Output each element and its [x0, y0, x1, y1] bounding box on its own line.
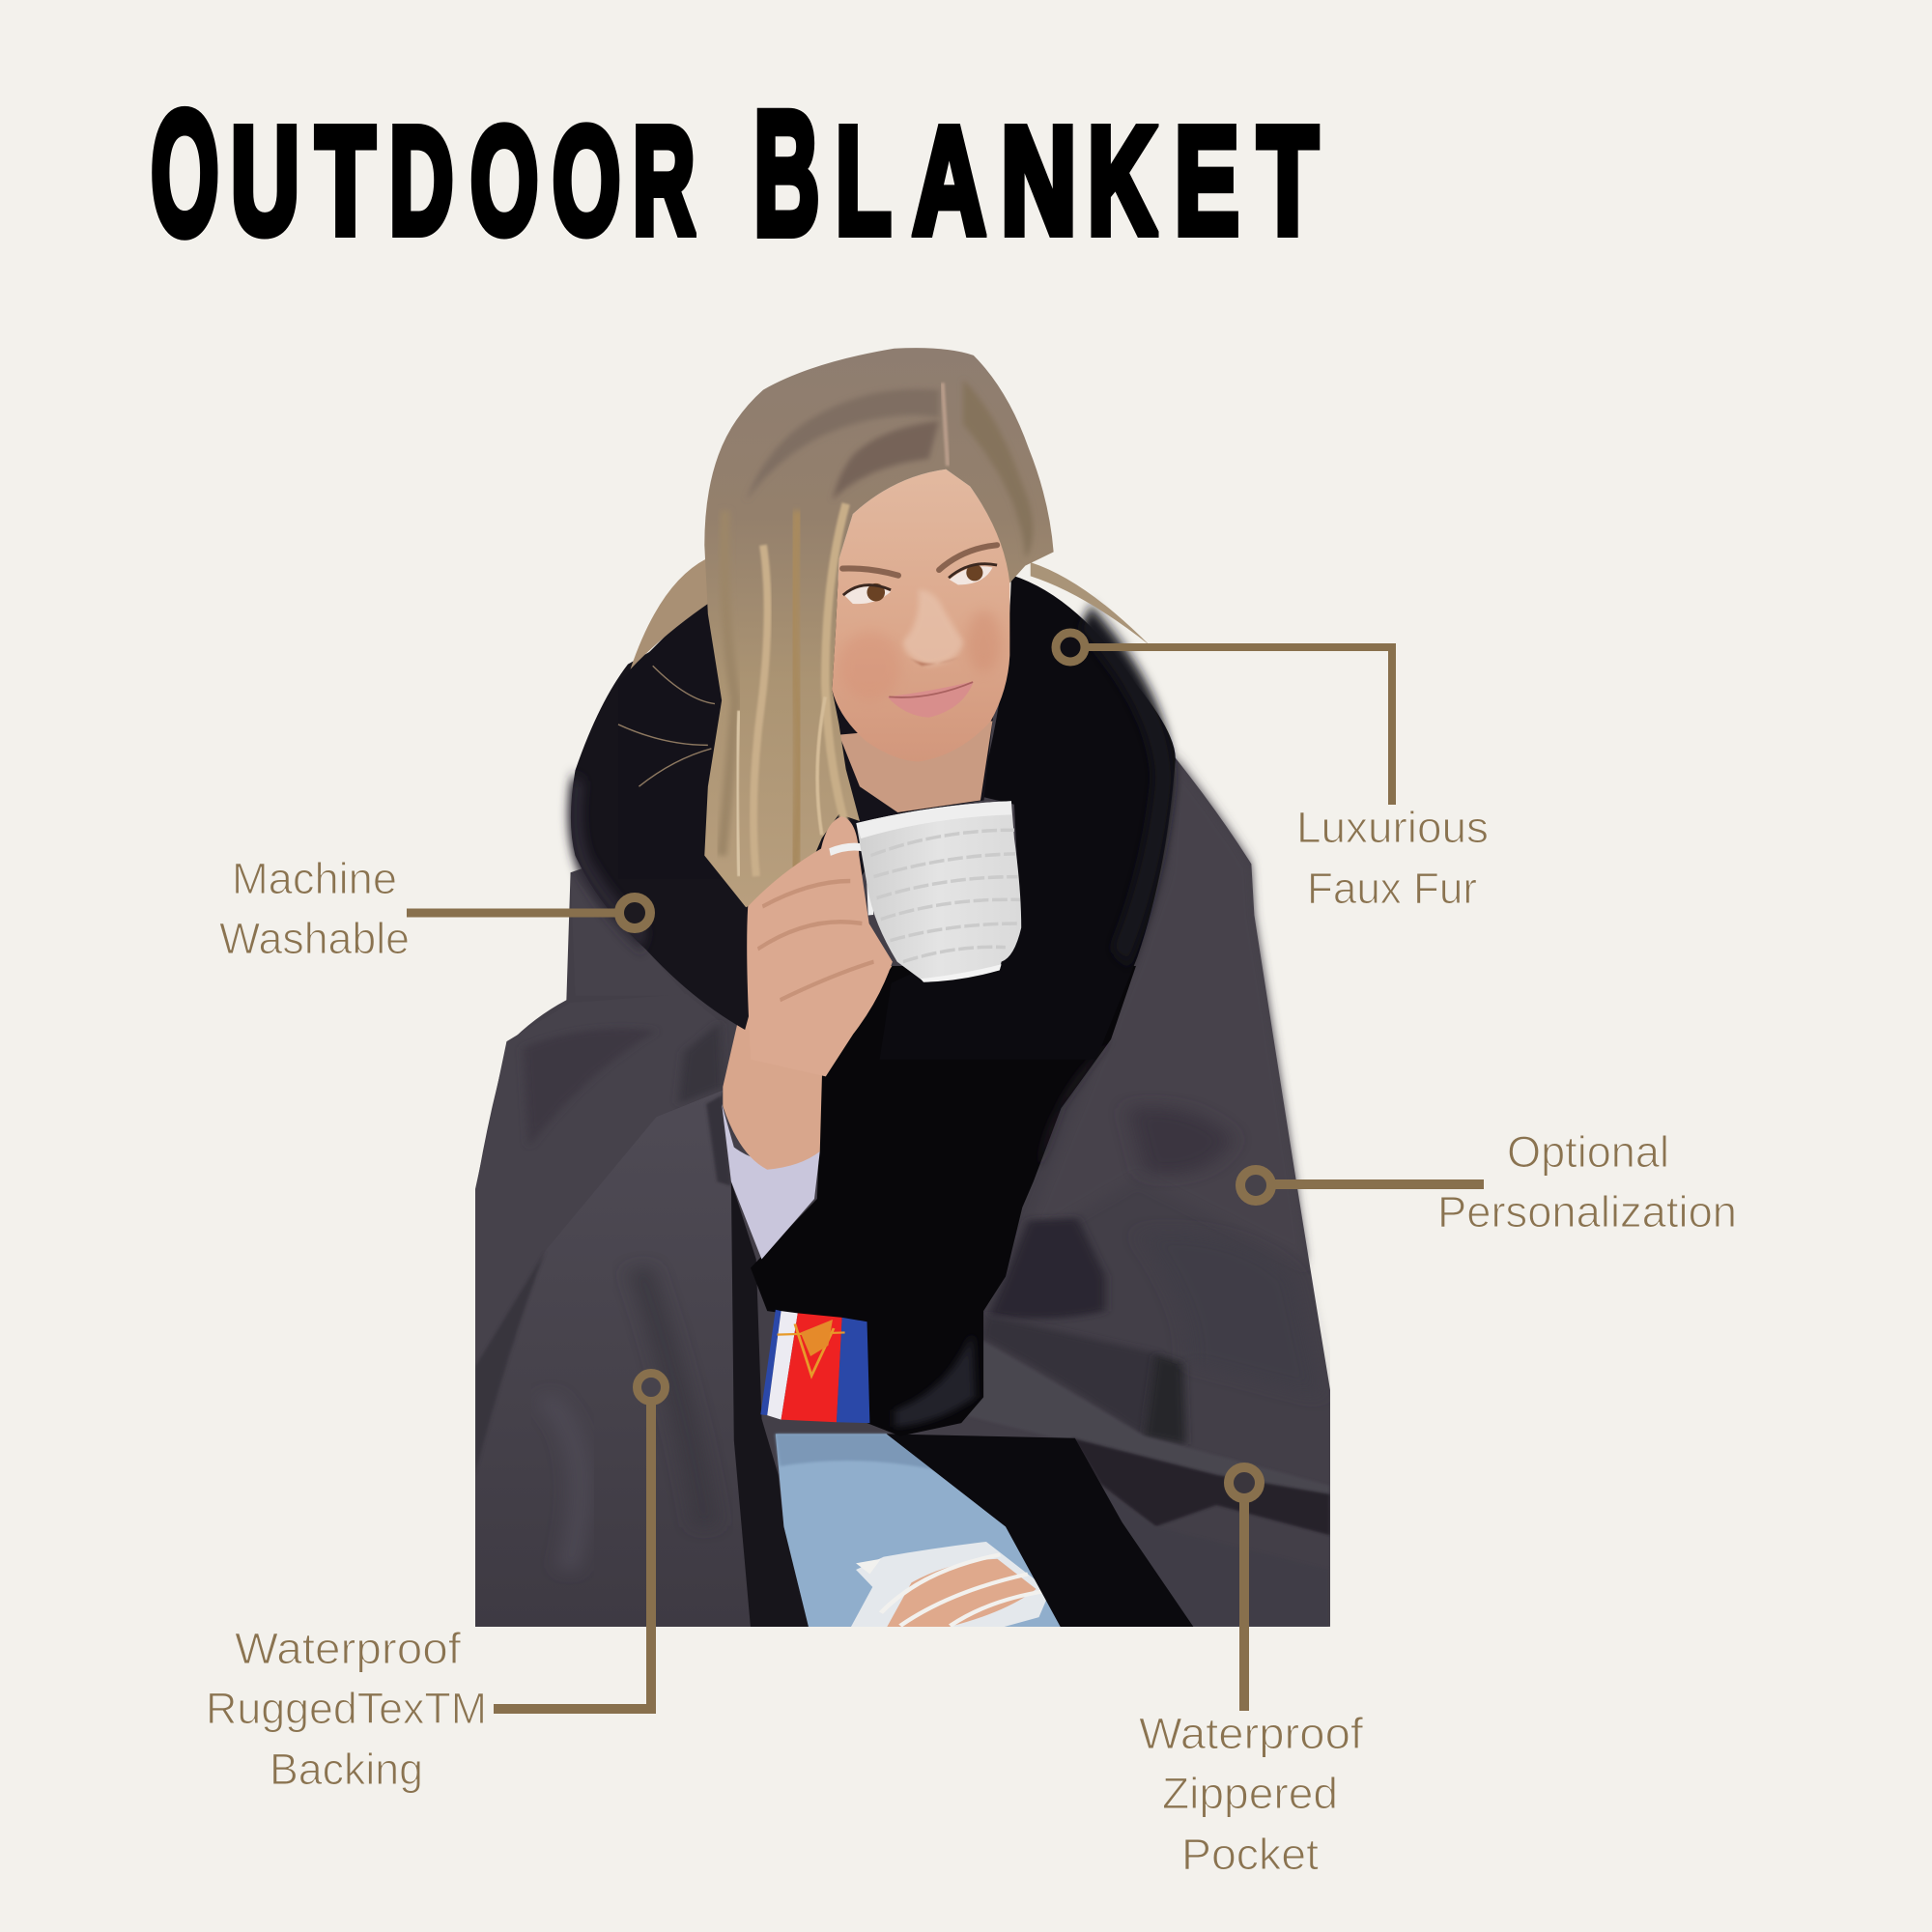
- title: B: [753, 74, 820, 271]
- sleeve: [722, 1104, 820, 1260]
- title: K: [1088, 97, 1156, 266]
- callout: Waterproof RuggedTex Backing: [206, 1374, 665, 1794]
- left drape: [475, 1031, 720, 1194]
- label: Washable: [219, 914, 410, 963]
- label: Machine: [232, 854, 397, 903]
- callout: Optional Personalization: [1240, 1127, 1737, 1236]
- fur behind the head: [649, 581, 993, 875]
- front panel: [475, 1091, 751, 1628]
- blanket folds and lower body: [475, 966, 1330, 1628]
- label: [1139, 1709, 1364, 1879]
- title: N: [1001, 97, 1077, 266]
- right folds: [961, 1107, 1330, 1628]
- title: R: [633, 97, 695, 266]
- face: [832, 469, 1009, 762]
- neck: [839, 721, 992, 812]
- upper fur collar: [571, 575, 1176, 1060]
- label: Backing: [270, 1745, 423, 1794]
- label: Waterproof: [235, 1624, 462, 1673]
- title: E: [1175, 97, 1239, 266]
- title: O: [553, 97, 620, 266]
- callout: Waterproof Zippered Pocket: [1139, 1467, 1364, 1879]
- blanket silhouette: [475, 668, 1330, 1627]
- forearm: [723, 966, 892, 1170]
- hand and mug: [747, 801, 1021, 1076]
- central fur trim: [751, 966, 1136, 1436]
- hair: [618, 348, 1150, 907]
- title: T: [1258, 97, 1318, 266]
- label: [1437, 1127, 1737, 1236]
- label: [219, 854, 410, 963]
- hand: [747, 816, 893, 1076]
- title: O: [470, 97, 538, 266]
- flag patch: [760, 1310, 869, 1423]
- label: Faux Fur: [1307, 864, 1477, 913]
- label: Pocket: [1181, 1830, 1320, 1879]
- lips: [888, 681, 974, 718]
- label: Personalization: [1437, 1187, 1737, 1236]
- title: [151, 74, 1320, 271]
- label: Waterproof: [1139, 1709, 1364, 1758]
- label: Luxurious: [1296, 803, 1489, 852]
- photo: woman wrapped in outdoor blanket: [475, 348, 1330, 1628]
- title: L: [836, 97, 892, 266]
- title: T: [316, 97, 375, 266]
- label: Zippered: [1162, 1769, 1338, 1818]
- label: [206, 1624, 487, 1794]
- label: RuggedTexTM: [206, 1684, 487, 1733]
- lower fur trim: [887, 1434, 1194, 1628]
- title: O: [151, 74, 219, 271]
- eyes: [843, 564, 997, 604]
- callout: Machine Washable: [219, 854, 650, 963]
- callout: Luxurious Faux Fur: [1056, 633, 1489, 913]
- mug: [830, 801, 1021, 982]
- eyebrows: [842, 545, 997, 576]
- label: Optional: [1507, 1127, 1669, 1177]
- inner fur strip: [731, 1181, 809, 1628]
- ripped knee: [850, 1542, 1050, 1628]
- title: A: [913, 97, 985, 266]
- jeans: [776, 1434, 1061, 1628]
- head: [618, 348, 1150, 907]
- title: U: [231, 97, 299, 266]
- label: [1296, 803, 1489, 913]
- title: D: [389, 97, 453, 266]
